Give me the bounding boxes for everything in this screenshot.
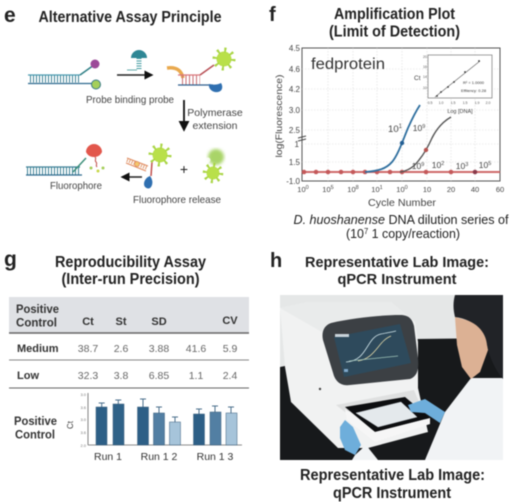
- heading: amplification plot: (Limit of Detection): [329, 24, 460, 40]
- inset chart: standard curve: Ct: [414, 75, 421, 82]
- table header: Positive: [16, 304, 59, 316]
- curve labels: 1: [399, 124, 403, 130]
- inset chart: standard curve: 0.5: [428, 101, 432, 105]
- drawer with sample plate: [337, 390, 431, 432]
- y axis labels: 1.5: [289, 158, 301, 167]
- line chart: amplification curves: [274, 44, 504, 209]
- x axis labels: 0: [405, 185, 408, 191]
- table row: low: 32.3: [78, 370, 98, 382]
- x axis labels: 10: [322, 185, 331, 194]
- table row: medium: 41.6: [186, 343, 206, 355]
- bar chart: Ct by run: 2.0: [80, 443, 87, 448]
- inset chart: standard curve: 20: [423, 55, 427, 59]
- y axis labels: 4.2: [289, 85, 301, 94]
- inset chart: standard curve: 16: [423, 65, 427, 69]
- instrument screen: [322, 315, 418, 385]
- x axis labels: Run 1: [94, 451, 122, 463]
- baseline series: [302, 170, 500, 174]
- heading: representative lab image: Representative Lab Image:: [305, 254, 489, 271]
- inset chart: standard curve: Effiiency: 0.28: [461, 88, 487, 93]
- bar chart: Ct by run: Ct: [66, 420, 75, 429]
- bench: [280, 338, 503, 460]
- bar chart: Ct by run: 3.6: [80, 430, 87, 435]
- curve: high concentration: [365, 105, 420, 172]
- x axis labels: 1: [380, 185, 383, 191]
- icon: probe on DNA duplex: [28, 60, 100, 89]
- table row: medium: [17, 343, 237, 355]
- x axis labels: [297, 185, 504, 194]
- heading: reproducibility assay: (Inter-run Precision): [62, 271, 200, 288]
- curve labels: 10: [479, 160, 488, 170]
- heading: amplification plot: Amplification Plot: [334, 6, 456, 23]
- panel letter e: e: [4, 4, 16, 27]
- heading: alternative assay principle: Alternative Assay Principle: [38, 9, 222, 26]
- table row: medium: 2.6: [114, 343, 128, 355]
- caption: dilution series: 7: [364, 227, 369, 236]
- curve labels: 2: [441, 161, 444, 167]
- x axis labels: Run 1 3: [197, 451, 234, 463]
- icon: bound probe with fluorophore: [167, 50, 233, 92]
- table row: low: [17, 370, 237, 382]
- curve labels: 10: [432, 160, 441, 170]
- y axis labels: 1: [295, 140, 300, 149]
- x axis title: Cycle Number: [368, 197, 437, 209]
- curve: lower concentration: [400, 117, 451, 172]
- curve labels: 9: [422, 124, 425, 130]
- table header: CV: [222, 315, 238, 327]
- label: probe binding probe: Probe binding probe: [86, 94, 174, 106]
- inset chart: standard curve: 1.5: [463, 101, 467, 105]
- bar chart: Ct by run: 3.0: [80, 392, 87, 397]
- table header: Control: [16, 318, 57, 330]
- icon: extended duplex with quencher: [26, 144, 104, 175]
- inset chart: standard curve: 1.5: [451, 101, 455, 105]
- icon: released fluorophore complex: [126, 146, 169, 188]
- y axis labels: [286, 44, 301, 186]
- label: polymerase extension: extension: [193, 120, 238, 132]
- curve labels: 10: [412, 161, 421, 171]
- curve labels: 10: [388, 124, 399, 135]
- instrument body: [280, 302, 428, 448]
- x axis labels: 20: [447, 185, 455, 194]
- bar chart: Ct by run: 3.6: [80, 405, 87, 410]
- x axis labels: 10: [347, 185, 356, 194]
- curve labels: 5: [488, 161, 491, 167]
- panel letter g: g: [4, 248, 17, 271]
- table row: medium: Medium: [17, 343, 59, 355]
- table header: SD: [151, 316, 167, 328]
- table row: medium: 38.7: [78, 343, 98, 355]
- curve labels: 9: [421, 162, 424, 168]
- heading: representative lab image: qPCR Instrument: [338, 271, 456, 288]
- label: polymerase extension: Polymerase: [187, 107, 243, 119]
- panel letter f: f: [269, 4, 276, 26]
- table row: low: Low: [17, 370, 39, 382]
- bars: [96, 404, 237, 445]
- curve labels: 10: [456, 161, 465, 171]
- inset chart: standard curve: Log [DNA]: [447, 109, 473, 115]
- arrow: polymerase extension: [183, 100, 185, 130]
- arrow: fluorophore release: [122, 176, 142, 178]
- x axis labels: [94, 451, 234, 463]
- table row: low: 3.8: [114, 370, 128, 382]
- table header: [16, 304, 238, 330]
- x axis labels: 5: [331, 185, 334, 191]
- x axis labels: 0: [306, 185, 309, 191]
- label: positive control: Positive: [14, 414, 57, 428]
- panel letter h: h: [270, 250, 282, 272]
- curve labels: 3: [465, 162, 468, 168]
- bar chart: Ct by run: 3.0: [80, 417, 87, 422]
- x axis labels: 40: [471, 185, 479, 194]
- curve labels: 10: [413, 123, 422, 133]
- icon: free fluorophores: [205, 149, 224, 181]
- panel f: amplification plot: [269, 4, 509, 241]
- caption: dilution series: 1 copy/reaction): [368, 226, 460, 241]
- y axis labels: 4.5: [289, 44, 301, 53]
- technician coat: [352, 378, 503, 460]
- y axis title: log(Fluorescence): [274, 74, 285, 158]
- axis break: [298, 136, 306, 141]
- y axis labels: 3.0: [289, 106, 301, 115]
- caption: dilution series: D. huoshanense DNA dilution series of: [294, 212, 513, 227]
- panel e: alternative assay principle: [4, 4, 243, 206]
- x axis labels: 8: [356, 185, 359, 191]
- inset chart: standard curve: 2.0: [486, 101, 490, 105]
- inset chart: standard curve: [414, 55, 492, 115]
- inset chart: standard curve: R² = 1.0000: [463, 80, 485, 85]
- label: fedprotein: fedprotein: [311, 56, 385, 73]
- x axis labels: 10: [371, 185, 380, 194]
- technician face: [455, 317, 488, 379]
- table row: low: 6.85: [149, 370, 169, 382]
- y axis labels: 4.6: [289, 65, 301, 74]
- bar chart: Ct by run: [66, 392, 242, 463]
- gloves: [340, 399, 445, 455]
- caption: representative lab image: qPCR Instrument: [333, 485, 452, 502]
- y axis labels: 2.5: [289, 126, 301, 135]
- panel g: reproducibility assay: [4, 248, 249, 463]
- label: positive control: Control: [15, 428, 55, 442]
- technician hair: [454, 295, 503, 379]
- table row: medium: 3.88: [149, 343, 169, 355]
- table header: Ct: [82, 316, 94, 328]
- label: fluorophore: Fluorophore: [50, 180, 102, 192]
- x axis labels: 10: [423, 185, 431, 194]
- icon: hairpin probe: [127, 50, 147, 70]
- x axis labels: 10: [396, 185, 405, 194]
- inset chart: standard curve: 1.9: [475, 101, 479, 105]
- x axis labels: 60: [496, 185, 504, 194]
- table header: St: [116, 316, 127, 328]
- table row: medium: 5.9: [223, 343, 237, 355]
- curve labels: [388, 123, 491, 171]
- caption: representative lab image: Representative Lab Image:: [300, 467, 485, 484]
- label: fluorophore release: Fluorophore release: [133, 194, 221, 206]
- inset chart: standard curve: 14: [423, 75, 427, 79]
- x axis labels: 10: [297, 185, 306, 194]
- table row: low: 1.1: [189, 370, 203, 382]
- table: precision values: [9, 297, 249, 388]
- inset chart: standard curve: 10: [423, 86, 427, 90]
- inset chart: standard curve: 1.0: [439, 101, 443, 105]
- x axis labels: Run 1 2: [141, 451, 178, 463]
- panel h: representative lab image: [270, 250, 503, 502]
- caption: dilution series: (10: [346, 226, 460, 241]
- plus sign: +: [180, 161, 188, 177]
- photo: qPCR instrument with technician: [280, 295, 503, 460]
- table row: low: 2.4: [223, 370, 237, 382]
- error bars: [99, 399, 234, 422]
- arrow: probe binding: [117, 74, 152, 76]
- heading: reproducibility assay: Reproducibility Assay: [55, 254, 206, 271]
- y axis labels: -1.0: [286, 177, 301, 186]
